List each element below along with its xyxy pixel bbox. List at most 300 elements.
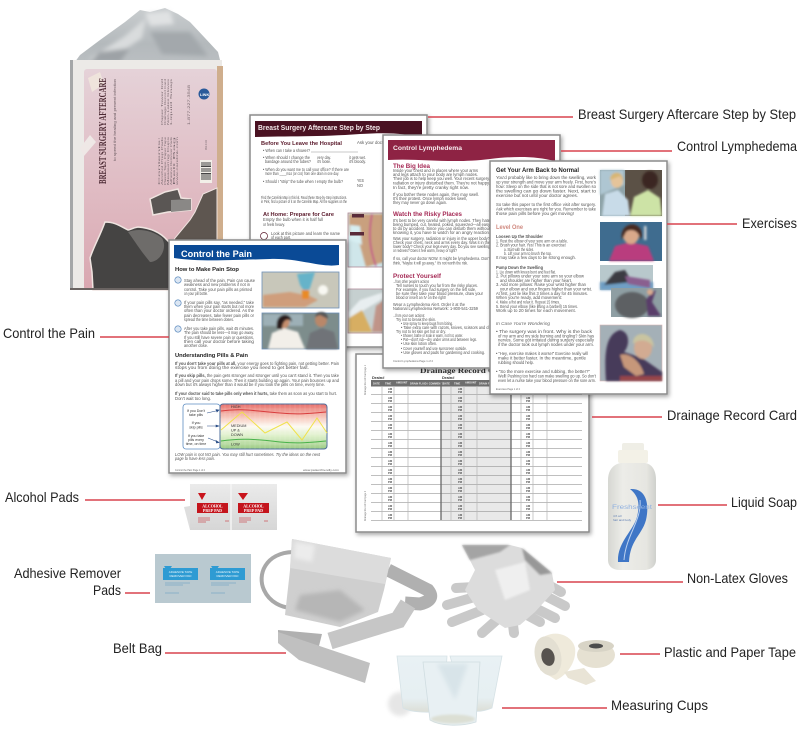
table AM/PM entries: PM: [458, 498, 463, 502]
text block: how to make pain stop: pain decreases, take fewer pain pills or: [184, 313, 255, 318]
table AM/PM entries: AM: [526, 513, 531, 517]
table AM/PM entries: PM: [526, 471, 531, 475]
drainage record card: [356, 354, 589, 532]
text block: the big idea: and legs attach to your body are lymph nodes.: [393, 172, 478, 177]
text block: how to make pain stop: often than your doctor ordered. As the: [184, 308, 255, 313]
table AM/PM entries: PM: [388, 435, 393, 439]
text block: watch the risky places: or redness? Does it feel warm, heavy or tight?: [393, 248, 458, 253]
table AM/PM entries: AM: [526, 504, 531, 508]
text block: protect yourself: For example, if you had surgery on the left side,: [396, 287, 476, 292]
table AM/PM entries: AM: [458, 405, 463, 409]
document: Breast Surgery Aftercare Step by Step: [250, 115, 427, 347]
package barcode: [200, 160, 212, 183]
text block: level one: At first, just lie like this 3 times a day for 45 minutes.: [496, 291, 588, 296]
text block: protect yourself: Control Lymphedema Page 1 of 2: [393, 359, 434, 363]
low pain curve: [221, 439, 326, 443]
text block: level one: 1. Rest the elbow of your sore arm on a table.: [496, 238, 568, 244]
table AM/PM entries: AM: [388, 450, 393, 454]
package photo: figures: [70, 188, 223, 290]
table AM/PM entries: PM: [388, 444, 393, 448]
text block: level one: 4. Make a fist and relax it. Repeat 15 times.: [496, 300, 560, 304]
chart labels: take pills: [189, 413, 203, 417]
skipped pills curve: [221, 412, 327, 440]
banner title: Control the Pain: [181, 249, 252, 259]
table AM/PM entries: AM: [388, 486, 393, 490]
text block: chart note: page to have less pain.: [174, 456, 215, 461]
table AM/PM entries: AM: [526, 468, 531, 472]
table AM/PM entries: AM: [458, 504, 463, 508]
text block: understanding pills and pain: If your doctor said to take pills only when it hurts, take them as soon as you start to hurt.: [175, 391, 337, 396]
text block: understanding pills and pain: Understanding Pills & Pain: [175, 353, 248, 359]
text block: how to make pain stop: weakness and new problems if not in: [184, 282, 251, 287]
table AM/PM entries: AM: [388, 459, 393, 463]
table AM/PM entries: AM: [526, 396, 531, 400]
text block: how to make pain stop: How to Make Pain Stop: [175, 267, 240, 273]
package contents list: Alcohol Prep Pads: [160, 136, 164, 185]
table AM/PM entries: PM: [458, 444, 463, 448]
text block: get your arm back to normal: Ask which exercises are right for you. Remember to take: [496, 206, 597, 212]
table AM/PM entries: AM: [526, 450, 531, 454]
text block: understanding pills and pain: Don't wait too long.: [175, 396, 211, 401]
label: Exercises: [667, 215, 797, 231]
text block: protect yourself: [393, 273, 489, 363]
bottle label: hair and body: [613, 518, 632, 522]
text block: protect yourself: • Take extra care with razors, knives, scissors and cl: [401, 325, 489, 330]
table AM/PM entries: PM: [388, 471, 393, 475]
chart labels: [186, 405, 246, 446]
table AM/PM entries: PM: [388, 453, 393, 457]
package contents list: Drainage Record Card: [163, 78, 167, 125]
table AM/PM entries: AM: [388, 432, 393, 436]
text block: before you leave: more than ____mLs (or ccs) from one drain in one day.: [265, 171, 339, 176]
text block: understanding pills and pain: If you skip pills, the pain gets stronger and stronger until you can't stand it. Then you take: [175, 373, 340, 378]
banner: [174, 245, 339, 266]
document: Exercises: [490, 161, 667, 394]
package contents list: Paper Tower Roll: [160, 78, 164, 125]
package contents list: Plastic Tape, Paper Tape: [163, 137, 167, 185]
table AM/PM entries: PM: [458, 507, 463, 511]
text block: how to make pain stop: then call your doctor before taking: [184, 339, 255, 344]
text block: the big idea: Inside your chest and in places where your arms: [393, 168, 478, 173]
package subtitle: to speed the healing and prevent infection: [113, 79, 117, 161]
table AM/PM entries: PM: [388, 516, 393, 520]
table header: AMOUNT: [465, 380, 477, 384]
banner title: Breast Surgery Aftercare Step by Step: [258, 125, 380, 132]
text block: before you leave: Look at this picture and learn the name: [271, 231, 341, 236]
table AM/PM entries: AM: [526, 405, 531, 409]
kit package photo: [70, 8, 223, 290]
table AM/PM entries: [388, 387, 531, 520]
chart labels: HIGH: [231, 405, 241, 409]
table AM/PM entries: PM: [388, 480, 393, 484]
chart labels: MEDIUM: [231, 424, 246, 428]
table AM/PM entries: AM: [388, 477, 393, 481]
package logo: LINK: [200, 92, 209, 97]
text block: in case you're wondering: [496, 321, 597, 383]
non-latex gloves: [447, 545, 565, 633]
table AM/PM entries: PM: [458, 471, 463, 475]
text block: understanding pills and pain: If you don't take your pills at all, your energy goes to fighting pain, not getting better. Pain: [175, 361, 340, 366]
text block: before you leave: YES: [357, 178, 364, 183]
text block: protect yourself: National Lymphedema Network: 1-800-541-3259: [393, 306, 479, 311]
label: Non-Latex Gloves: Non-Latex Gloves: [687, 570, 788, 586]
bottle label: 4 fl.oz/: [613, 514, 622, 518]
table header: TIME: [454, 382, 460, 386]
page footer: Control the Pain Page 1 of 2: [175, 469, 206, 472]
chart labels: time, on time: [186, 442, 206, 446]
package logo: [198, 88, 210, 100]
table AM/PM entries: PM: [388, 390, 393, 394]
text block: understanding pills and pain: stops you from doing the exercise you need to get better fast.: [175, 365, 309, 370]
table AM/PM entries: PM: [526, 498, 531, 502]
text block: how to make pain stop: on your pill bottle.: [184, 291, 208, 296]
text block: get your arm back to normal: So take this paper to the first office visit after surgery.: [496, 202, 596, 207]
card side notes: [363, 365, 367, 521]
text block: protect yourself: • Shower, bathe or soak in warm, not hot, water.: [401, 333, 463, 338]
label: Adhesive Remover Pads: [14, 565, 150, 598]
plastic and paper tape: [531, 633, 615, 685]
text block: protect yourself: Tell nurses to touch you far from the risky places.: [396, 283, 478, 288]
text block: before you leave: NO: [357, 183, 364, 188]
text block: before you leave: or feels heavy.: [263, 222, 285, 227]
text block: how to make pain stop: After you take pain pills, wait 45 minutes.: [184, 326, 254, 331]
text block: level one: 3. Add more pillows: Raise your wrist higher than: [496, 282, 587, 287]
text block: the big idea: If you bother these nodes again, they may swell.: [393, 192, 479, 197]
table AM/PM entries: PM: [458, 489, 463, 493]
label: Measuring Cups: Measuring Cups: [611, 697, 708, 713]
table AM/PM entries: AM: [388, 414, 393, 418]
alcohol pads: PREP PAD: [244, 508, 263, 513]
text block: watch the risky places: to do by accident. Since you can disturb them without: [393, 226, 491, 231]
table header: DATE: [443, 382, 450, 386]
photo: woman brushing hair: [600, 222, 662, 261]
text block: protect yourself: Protect Yourself: [393, 273, 442, 280]
table AM/PM entries: PM: [526, 507, 531, 511]
table AM/PM entries: PM: [388, 462, 393, 466]
table AM/PM entries: AM: [458, 486, 463, 490]
package contents list: Measuring Cups: [166, 136, 170, 185]
photo: woman with raised arm: [600, 325, 662, 381]
package contents list: Liquid Soap: [169, 78, 173, 125]
text block: before you leave: it's bloody.: [349, 159, 366, 164]
card side notes: Drainage Record Card page 1: [363, 365, 367, 395]
adhesive remover pads: ADHESIVE TAPE: [169, 570, 192, 574]
page footer: www.patientfriendly.com: [303, 469, 339, 472]
text block: get your arm back to normal: You'd probably like to bring down the swelling, work: [496, 175, 597, 180]
pain level chart: [183, 404, 327, 449]
text block: watch the risky places: Was your surgery, radiation or injury in the upper body?: [393, 236, 491, 241]
table AM/PM entries: PM: [526, 444, 531, 448]
table AM/PM entries: AM: [388, 495, 393, 499]
text block: protect yourself: be sure they take your blood pressure, draw your: [396, 291, 484, 296]
bottle swoosh: [618, 489, 647, 562]
chart labels: UP &: [231, 428, 240, 432]
table AM/PM entries: PM: [458, 516, 463, 520]
text block: protect yourself: • Use spray to keep bugs from biting.: [401, 321, 453, 326]
table header: TIME: [523, 382, 529, 386]
table AM/PM entries: PM: [458, 417, 463, 421]
text block: watch the risky places: Watch the Risky Places: [393, 211, 462, 218]
label: Alcohol Pads: Alcohol Pads: [5, 489, 79, 505]
text block: get your arm back to normal: [496, 168, 597, 216]
table AM/PM entries: AM: [458, 387, 463, 391]
table AM/PM entries: PM: [458, 480, 463, 484]
photo: lying down exercise: [600, 265, 653, 290]
alcohol pads: [184, 484, 277, 530]
photo: doctor and patient: [600, 170, 662, 216]
text block: watch the risky places: Check your chest, neck and arms every day. Was it in the: [393, 240, 491, 245]
adhesive remover pads: ADHESIVE TAPE: [216, 570, 239, 574]
table AM/PM entries: AM: [388, 504, 393, 508]
table AM/PM entries: AM: [388, 423, 393, 427]
text block: the big idea: they may never go down again.: [393, 200, 447, 205]
text block: watch the risky places: If so, call your doctor NOW. It might be lymphedema. Don't: [393, 256, 491, 261]
table AM/PM entries: AM: [458, 396, 463, 400]
table AM/PM entries: AM: [458, 495, 463, 499]
table AM/PM entries: AM: [388, 441, 393, 445]
drain headers: Drain#: [372, 375, 385, 380]
text block: before you leave: • When can I take a shower?: [263, 148, 311, 153]
text block: protect yourself: Try not to break the skin.: [396, 317, 436, 322]
text block: before you leave: Empty the bulb when it is half full: [263, 217, 323, 222]
text block: before you leave: • When do you want me to call your office? If there are: [263, 167, 350, 172]
text block: how to make pain stop: another dose.: [184, 343, 208, 348]
text block: watch the risky places: [393, 211, 491, 266]
table AM/PM entries: PM: [458, 453, 463, 457]
table AM/PM entries: PM: [526, 516, 531, 520]
table AM/PM entries: AM: [458, 432, 463, 436]
text block: level one: b. Lift your arm to brush the top.: [504, 251, 552, 256]
alcohol pads: ALCOHOL: [202, 504, 223, 508]
table AM/PM entries: AM: [388, 513, 393, 517]
package contents list: MADE IN USA: [204, 140, 208, 150]
text block: in case you're wondering: • The surgery was in front. Why is the back: [496, 329, 593, 334]
package contents list: [157, 78, 208, 185]
text block: how to make pain stop: If your pain pills say, "as needed," take: [184, 300, 255, 305]
text block: level one: Level One: [496, 225, 524, 231]
text block: before you leave: At Home: Prepare for Care: [263, 212, 334, 218]
text block: before you leave: of each part.: [271, 235, 291, 240]
table AM/PM entries: PM: [526, 453, 531, 457]
table AM/PM entries: PM: [526, 417, 531, 421]
text block: level one: and shoulder are higher than your heart.: [500, 278, 572, 283]
text block: how to make pain stop: [175, 267, 256, 348]
table AM/PM entries: AM: [526, 495, 531, 499]
package contents list: www.carelink.com: [175, 136, 179, 185]
text block: how to make pain stop: spread the time between doses.: [184, 317, 234, 322]
belt bag: [262, 539, 431, 683]
bottle highlight: [624, 500, 640, 560]
text block: protect yourself: Wear a Lymphedema Alert. Order it at the: [393, 302, 466, 307]
photo: patient and doctor: [262, 312, 339, 349]
text block: protect yourself: blood or insert an IV on the right!: [396, 295, 446, 300]
text block: the big idea: It's their protest. Once lymph nodes swell,: [393, 196, 467, 201]
table header: DATE: [513, 382, 520, 386]
chart labels: LOW: [231, 442, 240, 446]
text block: in case you're wondering: Well! Pushing too hard can make swelling go up. So don't: [498, 374, 597, 378]
text block: the big idea: In fact, they're pretty cranky right now.: [393, 185, 469, 190]
text block: in case you're wondering: even let a nurse take your blood pressure on the sore arm.: [498, 378, 596, 383]
text block: watch the risky places: being bumped, cut, heated, poked, squeezed—all easy: [393, 222, 491, 227]
text block: before you leave: • Should I "strip" the tube when I empty the bulb?: [263, 179, 344, 184]
text block: in case you're wondering: of my arm and my side burning and tingling? Skin has: [498, 334, 594, 338]
table header: AMOUNT: [535, 380, 547, 384]
table AM/PM entries: AM: [526, 432, 531, 436]
table AM/PM entries: AM: [526, 486, 531, 490]
text block: in case you're wondering: In Case You're Wondering: [496, 321, 550, 327]
table AM/PM entries: PM: [458, 435, 463, 439]
plastic wrap: [72, 8, 222, 68]
table AM/PM entries: AM: [388, 405, 393, 409]
chart labels: DOWN: [231, 433, 243, 437]
table AM/PM entries: PM: [526, 408, 531, 412]
text block: protect yourself: • Use gloves and pads for gardening and cooking.: [401, 350, 485, 355]
table AM/PM entries: PM: [388, 498, 393, 502]
table header: AMOUNT: [396, 380, 408, 384]
text block: protect yourself: • Use skin lotion often.: [401, 341, 437, 346]
photo: anatomy diagram: [348, 213, 384, 267]
text block: level one: When you're ready, add movement:: [496, 295, 562, 300]
table AM/PM entries: PM: [388, 417, 393, 421]
chart labels: If you Don't: [187, 409, 205, 413]
text block: before you leave: Find the Carelink Map in this kit. Read these Step-by-Step instructions.: [261, 195, 347, 200]
table AM/PM entries: PM: [388, 507, 393, 511]
measuring cups: [388, 656, 502, 725]
text block: get your arm back to normal: up your strength and move your arm freely. First, here's: [496, 180, 596, 184]
table AM/PM entries: AM: [388, 387, 393, 391]
text block: level one: a. Start with the sides.: [504, 247, 534, 252]
text block: in case you're wondering: rubbing should help.: [498, 360, 534, 365]
text block: level one: It may take a few days to be strong enough.: [496, 255, 576, 260]
banner: [255, 121, 422, 137]
text block: the big idea: The Big Idea: [393, 163, 430, 170]
page footer: Exercises Page 1 of 2: [496, 387, 521, 391]
photo: pill bottle: [262, 272, 339, 308]
text block: before you leave: it gets wet.: [349, 155, 366, 160]
table AM/PM entries: PM: [388, 426, 393, 430]
bottle label: Freshscent: [612, 505, 652, 511]
table header: DRAIN FLUID: [479, 382, 496, 386]
text block: before you leave: Before You Leave the Hospital: [261, 141, 342, 147]
table header: [371, 380, 583, 386]
table AM/PM entries: AM: [458, 441, 463, 445]
text block: in case you're wondering: nerves. Some got irritated during surgery especially: [498, 338, 595, 342]
text block: protect yourself: • Pat—don't rub—dry under arms and between legs.: [401, 337, 477, 342]
text block: understanding pills and pain: a pill and your pain drops some. Then it starts building up again. Your pain bounces up and: [175, 378, 340, 383]
text block: level one: Pump Down the Swelling: [496, 265, 543, 270]
label: Liquid Soap: [658, 494, 797, 510]
table AM/PM entries: PM: [388, 399, 393, 403]
table AM/PM entries: PM: [388, 408, 393, 412]
high pain curve: [221, 410, 326, 414]
drain headers: [372, 375, 455, 380]
text block: level one: your elbow and your fingers higher than your wrist.: [500, 286, 592, 292]
card side notes: Drainage Record Card page 2: [363, 491, 367, 521]
card title: Drainage Record Card: [420, 367, 508, 375]
chart labels: pills every: [188, 438, 204, 442]
table AM/PM entries: PM: [526, 462, 531, 466]
package contents list: Non-Latex Gloves: [166, 78, 170, 125]
text block: how to make pain stop: The pain should be less—it may go away.: [184, 330, 254, 335]
table AM/PM entries: PM: [526, 489, 531, 493]
table AM/PM entries: PM: [458, 408, 463, 412]
label: Belt Bag: Belt Bag: [113, 640, 162, 656]
text block: level one: 5. Bend your elbow (like lifting a barbell) 15 times.: [496, 304, 578, 309]
text block: level one: 2. Brush your hair. Yes! This is an exercise!: [496, 242, 566, 248]
table AM/PM entries: AM: [526, 477, 531, 481]
chart labels: skip pills: [189, 426, 203, 430]
text block: level one: [496, 225, 592, 313]
text block: watch the risky places: lower body? Check your legs every day. Do you see swelling: [393, 244, 491, 249]
table AM/PM entries: PM: [458, 462, 463, 466]
table AM/PM entries: AM: [458, 513, 463, 517]
label: Adhesive Remover Pads: Pads: [93, 582, 121, 598]
table grid: [371, 380, 582, 521]
package contents list: Contents:: [157, 136, 161, 185]
text block: get your arm back to normal: how: Sleep on the side that is not sore and swollen so: [496, 184, 597, 189]
text block: before you leave: Ask your doctor: [357, 140, 388, 145]
table AM/PM entries: AM: [458, 468, 463, 472]
page footer: [175, 469, 339, 472]
chart labels: If you: [192, 421, 200, 425]
table AM/PM entries: PM: [388, 489, 393, 493]
table AM/PM entries: AM: [526, 459, 531, 463]
table header: DRAIN FLUID / COMMENTS: [410, 382, 444, 386]
table header: DATE: [373, 382, 380, 386]
liquid soap bottle: [608, 443, 656, 570]
table AM/PM entries: AM: [526, 423, 531, 427]
text block: protect yourself: ...from other people's actions: [393, 279, 429, 284]
text block: how to make pain stop: Stay ahead of the pain. Pain can cause: [184, 278, 256, 283]
text block: how to make pain stop: control. Take your pain pills as printed: [184, 287, 253, 292]
drain headers: Drain#: [442, 375, 455, 380]
text block: in case you're wondering: if the doctor took out lymph nodes under your arm.: [498, 342, 594, 347]
text block: protect yourself: Try not to let skin get hot or dry.: [396, 329, 446, 334]
banner title: Control Lymphedema: [393, 145, 462, 152]
text block: level one: Work up to 20 times for each movement.: [496, 308, 576, 313]
package title: BREAST SURGERY AFTERCARE: [98, 78, 109, 184]
text block: before you leave: [260, 140, 388, 240]
package contents list: Belt Bag: [172, 136, 176, 185]
table AM/PM entries: PM: [526, 426, 531, 430]
table AM/PM entries: PM: [526, 480, 531, 484]
text block: in case you're wondering: • "So the more exercise and rubbing, the better?": [496, 369, 591, 374]
text block: level one: 2. Put pillows under your sore arm so your elbow: [496, 274, 585, 278]
photo: drain detail: [348, 289, 384, 333]
text block: before you leave: • When should I change the: [263, 155, 311, 160]
table AM/PM entries: AM: [526, 441, 531, 445]
text block: the big idea: radiation or injury disturbed them. They're not happy.: [393, 180, 490, 186]
alcohol pads: ALCOHOL: [243, 504, 264, 508]
text block: level one: Loosen Up the Shoulder: [496, 234, 543, 239]
photo: pillow exercise: [611, 288, 662, 318]
text block: before you leave: very day.: [317, 155, 331, 160]
adhesive remover pads: [155, 554, 251, 603]
document: Control the Pain: [169, 240, 346, 473]
table AM/PM entries: AM: [458, 414, 463, 418]
alcohol pads: PREP PAD: [203, 508, 222, 513]
table AM/PM entries: AM: [458, 423, 463, 427]
adhesive remover pads: REMOVER PAD: [170, 574, 192, 578]
adhesive remover pads: REMOVER PAD: [217, 574, 239, 578]
document: Control Lymphedema: [383, 135, 560, 368]
chart arrows: [207, 410, 219, 443]
text block: get your arm back to normal: Get Your Arm Back to Normal: [496, 168, 579, 174]
bottle label: [612, 505, 652, 522]
table AM/PM entries: AM: [388, 396, 393, 400]
text block: get your arm back to normal: those pain pills before you get moving!: [496, 211, 574, 216]
table header: DRAIN FLUID / COMMENTS: [549, 382, 583, 386]
